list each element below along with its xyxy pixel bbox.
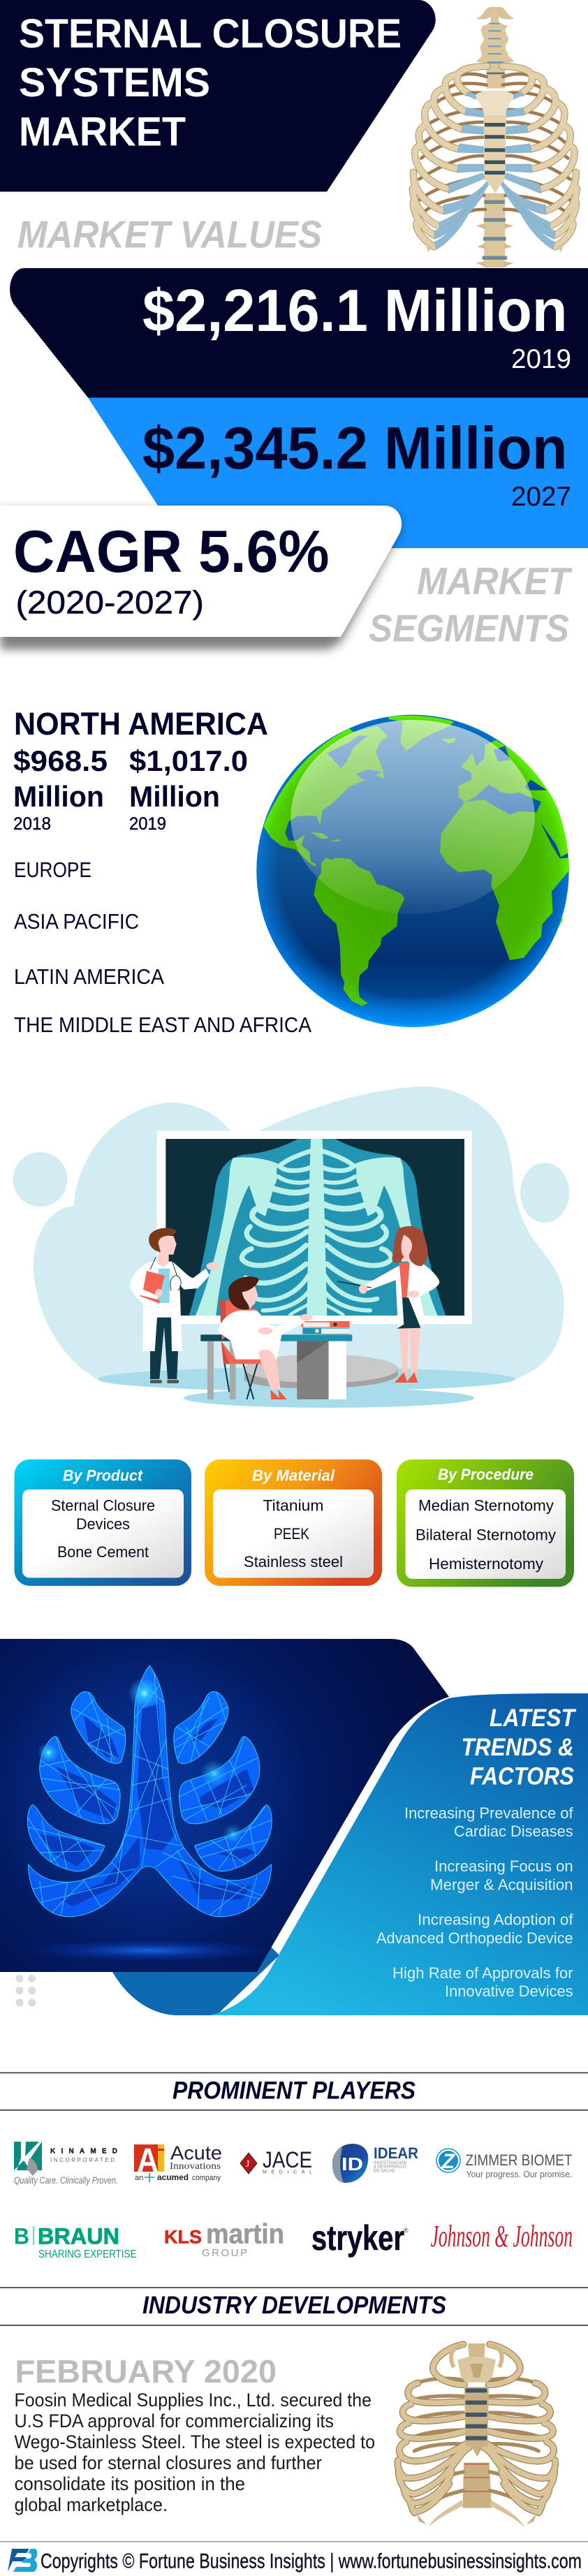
logo: Jace Medical: MEDICAL (263, 2170, 312, 2174)
north america: $1,017.0 (129, 744, 248, 777)
panel: by material (205, 1459, 382, 1586)
logo: B. Braun (14, 2223, 137, 2260)
trends list: Increasing Prevalence of (404, 1804, 573, 1822)
trends heading: FACTORS (470, 1763, 574, 1790)
text block: development description: Wego-Stainless Steel. The steel is expected to (14, 2431, 375, 2452)
logo: Fortune Business Insights (8, 2549, 37, 2572)
value 2027: $2,345.2 Million (142, 415, 567, 482)
logo: KLS Martin: KLS (164, 2226, 202, 2247)
doctor with pointer (337, 1226, 439, 1383)
CAGR value: CAGR 5.6% (13, 519, 330, 585)
product list (51, 1497, 155, 1561)
logo: Kinamed: KINAMED (50, 2148, 117, 2155)
logo: Kinamed: Quality Care. Clinically Proven. (14, 2175, 118, 2186)
text block: latest trends and factors (376, 1705, 576, 2000)
procedure list: Bilateral Sternotomy (416, 1526, 556, 1543)
title text (19, 11, 402, 155)
logo: Acute Innovations: A (137, 2142, 159, 2179)
doctor with clipboard (130, 1228, 219, 1383)
logo: Idear: INVESTIGACION (374, 2161, 406, 2165)
other regions (14, 858, 311, 1037)
logo: Idear: EN SALUD (374, 2169, 395, 2173)
illustration: rib cage with spine (413, 7, 577, 267)
title text: SYSTEMS (19, 60, 210, 105)
illustration: glowing lungs (20, 1665, 280, 1960)
north america: NORTH AMERICA (14, 706, 268, 742)
north america: 2018 (13, 814, 51, 834)
value 2019: $2,216.1 Million (142, 278, 567, 344)
panel: by product (14, 1459, 191, 1586)
material list: Stainless steel (244, 1553, 343, 1570)
logo: KLS Martin: martin (206, 2219, 284, 2250)
logo: Acute Innovations: Acute (170, 2142, 222, 2164)
logo: Acute Innovations: an (135, 2174, 143, 2182)
logo: KLS Martin (164, 2219, 284, 2259)
other regions: EUROPE (14, 858, 91, 882)
logo: Kinamed: INCORPORATED (50, 2157, 115, 2163)
procedure list: Hemisternotomy (429, 1555, 543, 1573)
procedure list: Median Sternotomy (418, 1497, 554, 1515)
footer (0, 2541, 588, 2573)
north america: Million (129, 780, 220, 813)
table (200, 1321, 352, 1399)
logo: Zimmer Biomet: Z (441, 2150, 456, 2173)
date: February 2020: FEBRUARY 2020 (15, 2353, 277, 2390)
logo: Stryker: stryker (311, 2218, 404, 2258)
logo: Acute Innovations (134, 2142, 222, 2182)
trends list: Advanced Orthopedic Device (376, 1929, 573, 1947)
title banner (0, 0, 436, 191)
logo: Idear (332, 2144, 418, 2183)
logo: Idear: ID (341, 2154, 363, 2174)
text block: development description (14, 2390, 375, 2515)
logo: KLS Martin: GROUP (202, 2247, 247, 2259)
heading: market segments (369, 559, 573, 649)
heading: prominent players: PROMINENT PLAYERS (172, 2077, 416, 2105)
heading: market segments: MARKET (417, 559, 573, 603)
panel: by procedure (397, 1459, 574, 1587)
logo: B. Braun: SHARING EXPERTISE (38, 2249, 137, 2260)
logo: B. Braun: B (14, 2223, 29, 2249)
heading: industry developments: INDUSTRY DEVELOPMENTS (142, 2292, 446, 2319)
title text: STERNAL CLOSURE (19, 11, 402, 57)
other regions: LATIN AMERICA (14, 964, 164, 989)
trends heading: TRENDS & (461, 1734, 574, 1761)
other regions: THE MIDDLE EAST AND AFRICA (14, 1013, 311, 1037)
grey platform (244, 1354, 398, 1388)
CAGR period: (2020-2027) (15, 584, 204, 620)
other regions: ASIA PACIFIC (14, 909, 139, 934)
logo: Acute Innovations: acumed (157, 2172, 189, 2182)
logo: Jace Medical: J (246, 2159, 250, 2170)
logo: Zimmer Biomet: Your progress. Our promise. (466, 2169, 573, 2179)
logo: B. Braun: BRAUN (38, 2223, 119, 2249)
logo: Idear: & DESARROLLO (374, 2165, 406, 2169)
floor (98, 1367, 515, 1408)
logo: Zimmer Biomet (436, 2149, 573, 2179)
logo: Zimmer Biomet: ZIMMER BIOMET (465, 2151, 573, 2169)
trends list: Increasing Adoption of (418, 1911, 574, 1929)
material list: Titanium (263, 1497, 324, 1515)
trends list: Increasing Focus on (434, 1857, 573, 1875)
logo: Jace Medical (240, 2147, 312, 2174)
text block: development description: be used for sternal closures and further (14, 2452, 322, 2473)
procedure list (416, 1497, 556, 1573)
text block: development description: consolidate its position in the (14, 2473, 245, 2494)
panel: CAGR (0, 506, 402, 649)
banner: 2019 market value (10, 268, 588, 398)
seated doctor (218, 1276, 313, 1399)
trends list: Merger & Acquisition (430, 1876, 573, 1894)
heading: market segments: SEGMENTS (369, 606, 569, 649)
panel: by material: By Material (252, 1466, 335, 1485)
background blob (13, 1087, 569, 1379)
logo: Stryker: ® (404, 2227, 409, 2234)
text block: development description: U.S FDA approval for commercializing its (14, 2411, 334, 2431)
illustration: globe (256, 715, 569, 1027)
panel: by procedure: By Procedure (438, 1466, 534, 1483)
trends heading (461, 1705, 576, 1790)
trends list: High Rate of Approvals for (392, 1964, 573, 1982)
product list: Devices (76, 1515, 130, 1533)
heading: market values: MARKET VALUES (17, 212, 322, 256)
banner: 2027 market value (88, 398, 588, 548)
material list: PEEK (274, 1525, 309, 1543)
product list: Bone Cement (57, 1543, 149, 1561)
north america: $968.5 (13, 744, 108, 777)
illustration: doctors reviewing a chest x-ray (13, 1087, 569, 1408)
logo: Acute Innovations: company (192, 2174, 221, 2182)
text block: development description: global marketplace. (14, 2494, 168, 2515)
logo: Kinamed (14, 2142, 118, 2186)
product list: Sternal Closure (51, 1497, 155, 1515)
panel: lungs and trends background (0, 1639, 588, 2015)
north america: 2019 (129, 814, 166, 834)
year 2019: 2019 (511, 344, 571, 374)
title text: MARKET (19, 109, 186, 155)
year 2027: 2027 (511, 482, 571, 512)
trends list: Innovative Devices (445, 1982, 573, 2000)
trends list: Cardiac Diseases (454, 1823, 573, 1840)
x-ray screen (157, 1131, 472, 1324)
logo: Jace Medical: JACE (263, 2147, 312, 2172)
panel: by product: By Product (63, 1466, 144, 1485)
north america: Million (13, 780, 104, 813)
logo: Idear: IDEAR (374, 2144, 418, 2162)
material list (244, 1497, 343, 1570)
logo: Acute Innovations: Innovations (170, 2161, 221, 2172)
trends heading: LATEST (490, 1705, 576, 1732)
trends list (376, 1804, 574, 2000)
text block: regions (13, 706, 311, 1037)
illustration: rib cage (397, 2343, 555, 2527)
text block: development description: Foosin Medical Supplies Inc., Ltd. secured the (14, 2390, 372, 2411)
north america (13, 706, 268, 834)
